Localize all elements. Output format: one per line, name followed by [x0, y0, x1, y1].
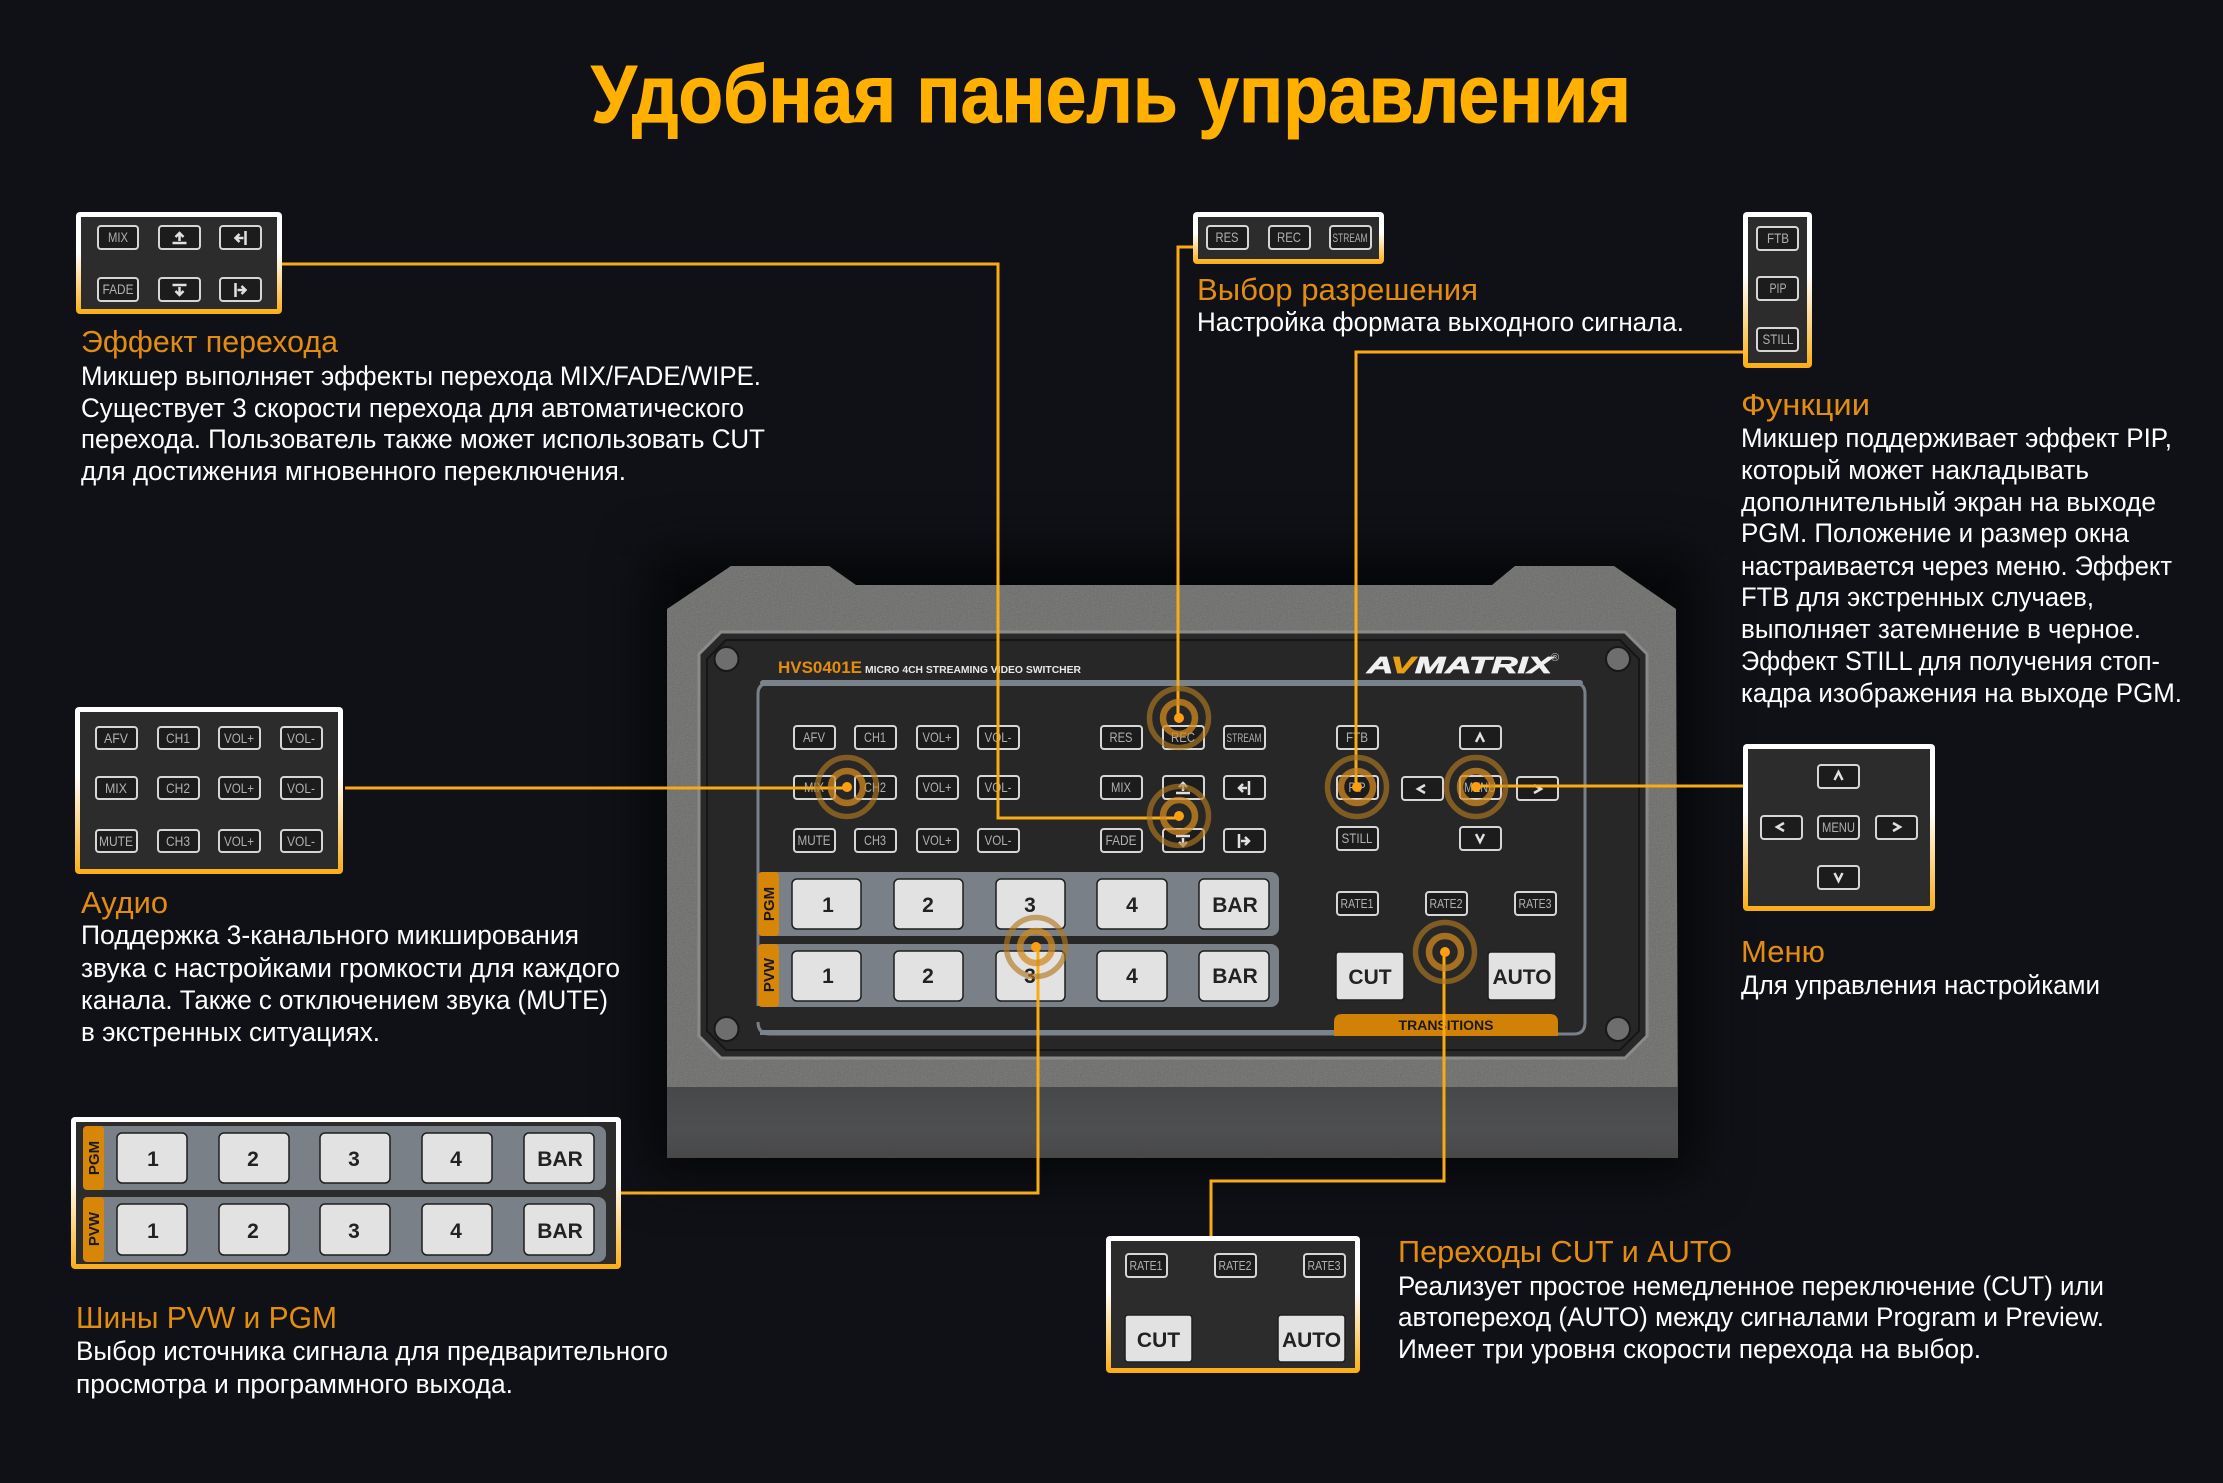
PGM bus: 3	[1024, 894, 1036, 917]
panel: audio: MIX	[105, 780, 128, 796]
panel: resolution: RES	[1216, 229, 1238, 245]
audio buttons: VOL-	[984, 779, 1012, 795]
text: cut and auto	[1398, 1234, 2104, 1364]
marker: REC	[1150, 688, 1208, 748]
resolution and transition effect buttons	[1101, 726, 1265, 852]
rate, cut and auto buttons: RATE2	[1430, 896, 1462, 911]
text: cut and auto: Переходы CUT и AUTO	[1398, 1234, 1732, 1269]
function and menu buttons: MENU	[1464, 779, 1496, 795]
audio buttons: VOL+	[922, 832, 952, 848]
text: functions: PGM. Положение и размер окна	[1741, 518, 2129, 548]
panel: audio: MUTE	[99, 833, 133, 849]
function and menu buttons: STILL	[1342, 830, 1373, 846]
rate, cut and auto buttons: AUTO	[1492, 966, 1552, 989]
panel: audio: VOL+	[224, 730, 254, 746]
audio buttons: CH2	[864, 779, 886, 795]
panel: functions: FTB	[1767, 230, 1789, 246]
panel: PGM and PVW buses: 4	[450, 1148, 462, 1171]
text: functions: Микшер поддерживает эффект PIP,	[1741, 423, 2172, 453]
text: menu	[1741, 934, 2100, 1000]
text: functions: дополнительный экран на выходе	[1741, 487, 2156, 517]
panel: PGM and PVW buses: 2	[247, 1148, 259, 1171]
panel: PGM and PVW buses: 2	[247, 1220, 259, 1243]
text: cut and auto: Имеет три уровня скорости перехода на выбор.	[1398, 1334, 1981, 1364]
text: transition effect: для достижения мгновенного переключения.	[81, 456, 626, 486]
audio buttons: MIX	[804, 779, 825, 795]
connector: functions	[1356, 352, 1744, 787]
PVW bus: 4	[1126, 965, 1138, 988]
panel: menu: MENU	[1822, 819, 1855, 835]
function and menu buttons	[1337, 726, 1558, 850]
panel: functions: STILL	[1762, 331, 1794, 347]
text: resolution	[1197, 272, 1684, 337]
PVW bus	[758, 944, 1279, 1007]
resolution and transition effect buttons: MIX	[1111, 779, 1132, 795]
brand logo: A V MATRIX	[1365, 652, 1555, 678]
PVW bus: PVW	[761, 957, 778, 992]
marker: MENU	[1446, 758, 1506, 816]
text: audio: Поддержка 3-канального микширования	[81, 920, 579, 950]
marker: wipe	[1150, 786, 1208, 846]
text: PGM and PVW buses: Выбор источника сигнала для предварительного	[76, 1336, 668, 1366]
text: PGM and PVW buses: Шины PVW и PGM	[76, 1300, 337, 1335]
text: functions: выполняет затемнение в черное.	[1741, 614, 2141, 644]
panel: PGM and PVW buses: 1	[147, 1220, 159, 1243]
PGM bus: 1	[822, 894, 834, 917]
panel: audio: VOL-	[287, 780, 315, 796]
text: audio: канала. Также с отключением звука (MUTE)	[81, 985, 608, 1015]
text: transition effect	[81, 324, 765, 486]
panel: transition effect: MIX	[108, 229, 129, 245]
text: transition effect: Эффект перехода	[81, 324, 339, 359]
audio buttons: VOL+	[922, 729, 952, 745]
panel: audio: VOL+	[224, 780, 254, 796]
panel: PGM and PVW buses: 3	[348, 1220, 360, 1243]
model label: MICRO 4CH STREAMING VIDEO SWITCHER	[865, 665, 1082, 676]
PGM bus: BAR	[1212, 894, 1258, 917]
panel: PGM and PVW buses: PVW	[86, 1211, 103, 1246]
PGM bus	[758, 872, 1279, 936]
panel: resolution: STREAM	[1332, 231, 1368, 245]
text: functions: Функции	[1741, 387, 1870, 422]
connector: audio	[345, 786, 847, 790]
panel: audio: VOL-	[287, 833, 315, 849]
resolution and transition effect buttons: STREAM	[1226, 731, 1262, 745]
function and menu buttons: FTB	[1346, 729, 1368, 745]
audio buttons: VOL-	[984, 832, 1012, 848]
text: resolution: Настройка формата выходного сигнала.	[1197, 307, 1684, 337]
connector: buses	[620, 947, 1038, 1193]
transitions label	[1334, 1014, 1558, 1036]
connector: resolution	[1178, 247, 1195, 717]
connector: menu	[1476, 784, 1743, 788]
panel: resolution: REC	[1277, 229, 1301, 245]
text: audio: звука с настройками громкости для каждого	[81, 953, 620, 983]
text: menu: Меню	[1741, 934, 1825, 969]
text: transition effect: перехода. Пользователь также может использовать CUT	[81, 424, 765, 454]
marker: bus button 3	[1006, 918, 1066, 976]
audio buttons: AFV	[803, 729, 826, 745]
panel: PGM and PVW buses: PGM	[86, 1141, 103, 1175]
panel: audio: CH2	[166, 780, 190, 796]
rate, cut and auto buttons: RATE1	[1340, 896, 1374, 911]
panel: audio: VOL+	[224, 833, 254, 849]
panel: cut and auto: RATE2	[1218, 1258, 1252, 1273]
text: transition effect: Существует 3 скорости перехода для автоматического	[81, 393, 744, 423]
transitions label: TRANSITIONS	[1399, 1017, 1493, 1033]
panel: resolution	[1193, 212, 1384, 264]
marker: PIP	[1328, 758, 1386, 816]
panel: functions	[1743, 212, 1812, 368]
panel: cut and auto: RATE1	[1130, 1258, 1162, 1273]
text: functions: FTB для экстренных случаев,	[1741, 582, 2094, 612]
text: cut and auto: автопереход (AUTO) между сигналами Program и Preview.	[1398, 1302, 2104, 1332]
PVW bus: 1	[822, 965, 834, 988]
panel: menu	[1743, 744, 1935, 911]
panel: PGM and PVW buses	[71, 1117, 621, 1269]
audio buttons: CH3	[864, 832, 886, 848]
audio buttons: VOL+	[922, 779, 952, 795]
text: menu: Для управления настройками	[1741, 970, 2100, 1000]
model label	[778, 658, 1082, 677]
panel: audio: CH3	[166, 833, 190, 849]
rate, cut and auto buttons: RATE3	[1518, 896, 1552, 911]
panel: PGM and PVW buses: 3	[348, 1148, 360, 1171]
audio buttons	[794, 726, 1019, 852]
text: audio: Аудио	[81, 885, 168, 920]
panel: transition effect: FADE	[102, 281, 134, 297]
panel: cut and auto: AUTO	[1282, 1329, 1341, 1352]
panel: audio: CH1	[166, 730, 190, 746]
resolution and transition effect buttons: FADE	[1106, 832, 1136, 848]
PGM bus: PGM	[761, 887, 778, 921]
panel: PGM and PVW buses: 4	[450, 1220, 462, 1243]
marker: MIX	[818, 758, 876, 816]
panel: cut and auto: RATE3	[1308, 1258, 1340, 1273]
PVW bus: BAR	[1212, 965, 1258, 988]
PGM bus: 2	[922, 894, 934, 917]
panel: transition effect	[76, 212, 282, 314]
PVW bus: 2	[922, 965, 934, 988]
audio buttons: CH1	[864, 729, 886, 745]
connector: transition effect	[282, 264, 1179, 818]
text: functions: который может накладывать	[1741, 455, 2089, 485]
panel: audio	[75, 707, 343, 874]
audio buttons: MUTE	[798, 832, 830, 848]
text: cut and auto: Реализует простое немедленное переключение (CUT) или	[1398, 1271, 2104, 1301]
rate, cut and auto buttons	[1336, 892, 1556, 1000]
text: functions: Эффект STILL для получения стоп-	[1741, 646, 2160, 676]
PGM bus: 4	[1126, 894, 1138, 917]
panel: functions: PIP	[1770, 280, 1786, 296]
panel: PGM and PVW buses: 1	[147, 1148, 159, 1171]
PVW bus: 3	[1024, 965, 1036, 988]
brand logo	[1365, 652, 1559, 678]
panel: cut and auto	[1106, 1236, 1360, 1373]
connector: cut and auto	[1211, 952, 1444, 1238]
title: Удобная панель управления	[591, 49, 1631, 140]
panel: audio: VOL-	[287, 730, 315, 746]
text: PGM and PVW buses	[76, 1300, 668, 1399]
text: resolution: Выбор разрешения	[1197, 272, 1478, 307]
marker: transitions	[1416, 922, 1474, 982]
text: functions: кадра изображения на выходе PGM.	[1741, 678, 2182, 708]
text: PGM and PVW buses: просмотра и программного выхода.	[76, 1369, 513, 1399]
text: functions	[1741, 387, 2182, 708]
screws	[714, 647, 1630, 1041]
function and menu buttons: PIP	[1348, 779, 1366, 795]
panel: PGM and PVW buses: BAR	[537, 1148, 583, 1171]
rate, cut and auto buttons: CUT	[1348, 966, 1392, 989]
resolution and transition effect buttons: REC	[1171, 729, 1195, 745]
text: audio: в экстренных ситуациях.	[81, 1017, 380, 1047]
text: transition effect: Микшер выполняет эффекты перехода MIX/FADE/WIPE.	[81, 361, 761, 391]
brand logo: ®	[1551, 652, 1559, 664]
panel: cut and auto: CUT	[1137, 1329, 1180, 1352]
model label: HVS0401E	[778, 658, 862, 677]
audio buttons: VOL-	[984, 729, 1012, 745]
panel: audio: AFV	[104, 730, 129, 746]
text: audio	[81, 885, 620, 1047]
text: functions: настраивается через меню. Эффект	[1741, 551, 2172, 581]
resolution and transition effect buttons: RES	[1110, 729, 1132, 745]
device: video switcher	[650, 555, 1695, 1175]
panel: PGM and PVW buses: BAR	[537, 1220, 583, 1243]
